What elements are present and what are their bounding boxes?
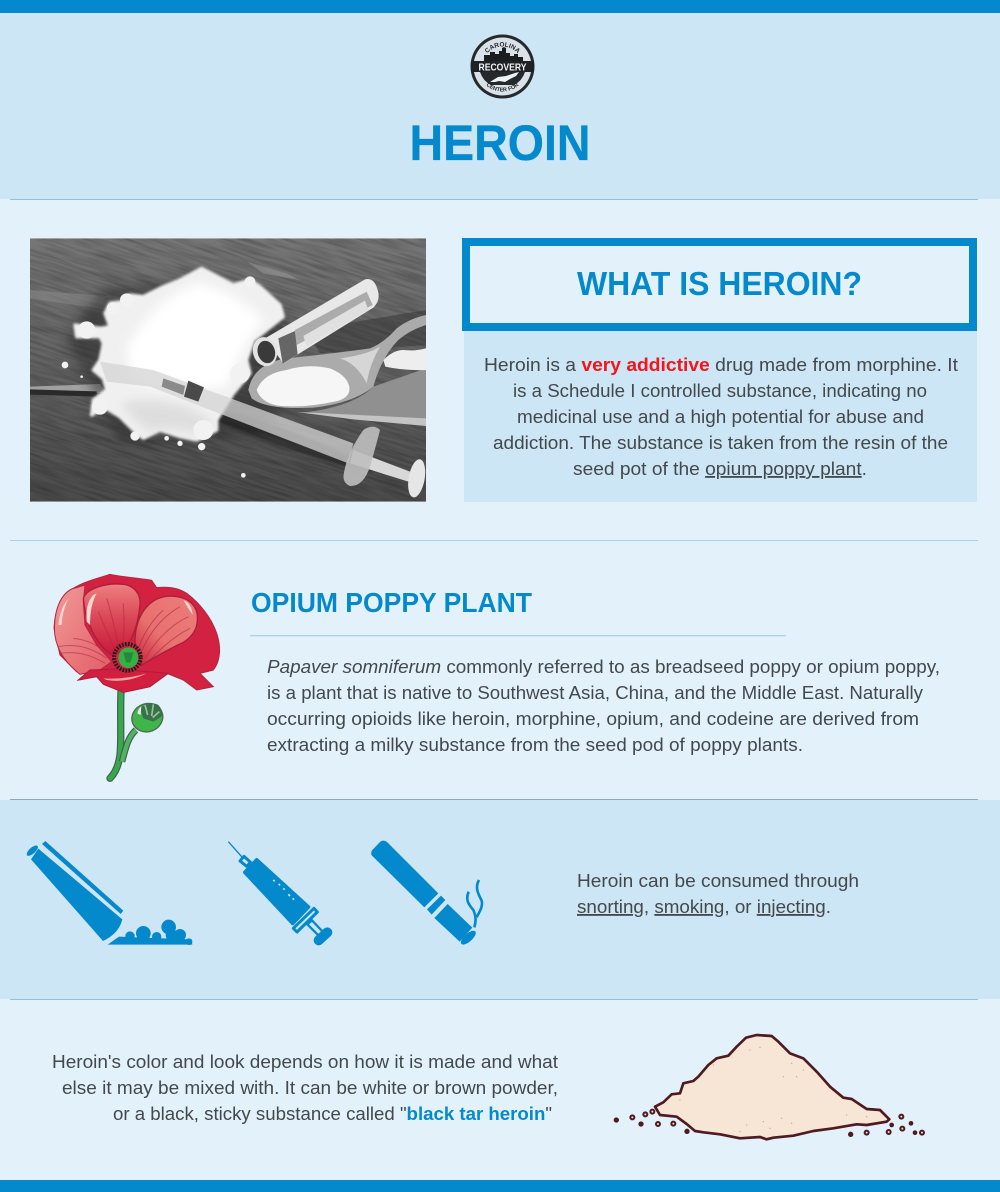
right petal (135, 596, 197, 665)
text block: consumption routes: Heroin can be consumed through (577, 871, 859, 891)
panel: definition text: medicinal use and a high potential for abuse and (517, 407, 924, 427)
top bar (0, 0, 1000, 13)
text block: colour and look: or a black, sticky substance called " black tar heroin" (113, 1104, 552, 1124)
left petal (54, 585, 112, 674)
powder pile (75, 268, 283, 440)
panel: definition text: Heroin is a very addictive drug made from morphine. It (484, 355, 958, 375)
panel: definition text: seed pot of the opium poppy plant . (573, 459, 867, 479)
right powder (383, 348, 426, 370)
icon: cigarette with smoke (371, 841, 482, 947)
text block: poppy description: is a plant that is native to Southwest Asia, China, and the Middle East. Naturally (267, 683, 924, 703)
illustration: opium poppy flower (54, 574, 220, 778)
heading box: What is heroin? (466, 242, 973, 327)
syringe (100, 362, 353, 463)
bottom bar (0, 1180, 1000, 1192)
title: HEROIN (410, 115, 590, 171)
icon: snorting straw and powder (25, 841, 192, 945)
text block: poppy description: occurring opioids like heroin, morphine, opium, and codeine are derived from (267, 709, 919, 729)
panel: consumption band (0, 800, 1000, 999)
icon: syringe (228, 842, 327, 940)
text block: poppy description: Papaver somniferum commonly referred to as breadseed poppy or opium poppy, (267, 657, 940, 677)
text block: colour and look: Heroin's color and look depends on how it is made and what (52, 1052, 558, 1072)
pod (128, 699, 167, 736)
scattered grains (630, 1110, 924, 1135)
logo: Carolina Recovery Center: RECOVERY (478, 62, 527, 74)
text block: consumption routes: snorting, smoking, or injecting. (577, 897, 831, 917)
text block: consumption routes (577, 871, 859, 917)
logo: Carolina Recovery Center (470, 34, 534, 98)
text block: poppy description: extracting a milky substance from the seed pod of poppy plants. (267, 735, 803, 755)
logo: Carolina Recovery Center: CENTER FOR (486, 83, 519, 92)
spoon (248, 315, 426, 408)
lower petal (78, 669, 168, 692)
flower centre (114, 644, 141, 671)
panel: definition text (464, 331, 977, 502)
photo: powder, spoon and syringe (30, 238, 426, 502)
logo: Carolina Recovery Center: CAROLINA (485, 42, 520, 54)
text block: colour and look (52, 1052, 558, 1124)
rolled bill (265, 279, 379, 363)
panel: definition text: is a Schedule I controlled substance, indicating no (513, 381, 927, 401)
text block: poppy description (267, 657, 940, 755)
illustration: powder pile (614, 1035, 924, 1139)
heading box: What is heroin?: WHAT IS HEROIN? (577, 265, 862, 302)
panel: definition text: addiction. The substance is taken from the resin of the (493, 433, 948, 453)
middle petal (83, 584, 140, 655)
text block: colour and look: else it may be mixed with. It can be white or brown powder, (62, 1078, 558, 1098)
stem (110, 692, 121, 778)
heading: opium poppy plant: OPIUM POPPY PLANT (251, 587, 532, 618)
header band (0, 13, 1000, 199)
flower silhouette (54, 574, 220, 692)
